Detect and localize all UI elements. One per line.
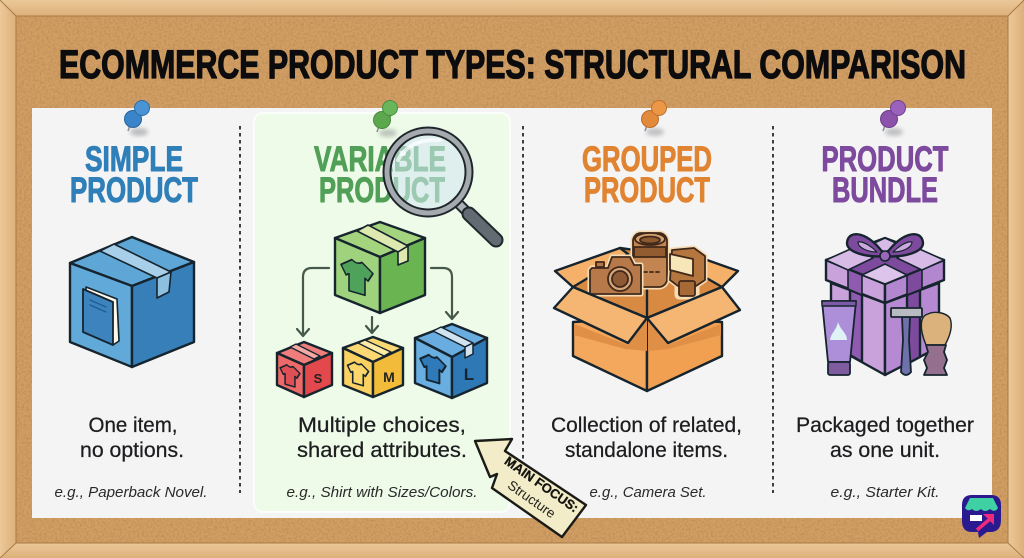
icon: green parent box — [335, 222, 425, 313]
heading: simple product: PRODUCT — [70, 171, 198, 210]
description: simple product: One item, — [88, 413, 178, 437]
bow — [847, 234, 923, 256]
icon: yellow medium box: M — [383, 369, 395, 385]
panel: variable product content — [277, 131, 496, 501]
highlighted panel: variable product — [254, 113, 510, 512]
logo badge — [962, 495, 1001, 538]
razor — [901, 317, 911, 375]
icon: blue box with book — [70, 237, 194, 367]
icon: magnifying glass — [387, 131, 496, 240]
heading: grouped product: PRODUCT — [584, 171, 710, 210]
paper sheet — [32, 108, 992, 518]
callout: main focus arrow — [475, 439, 586, 537]
example: grouped product: e.g., Camera Set. — [590, 484, 706, 501]
heading: simple product: SIMPLE — [85, 140, 183, 179]
description: product bundle: Packaged together — [796, 413, 974, 437]
example: product bundle: e.g., Starter Kit. — [830, 484, 940, 501]
heading: product bundle: BUNDLE — [832, 171, 938, 210]
description: variable product: shared attributes. — [297, 438, 467, 462]
pin: blue — [124, 100, 150, 136]
arrows: parent box to variants — [297, 268, 458, 336]
tube — [822, 301, 856, 362]
callout: main focus arrow: Structure — [505, 477, 558, 521]
example: variable product: e.g., Shirt with Sizes/Colors. — [286, 484, 478, 501]
description: grouped product: Collection of related, — [551, 413, 742, 437]
heading: variable product: PRODUCT — [319, 171, 445, 210]
heading: variable product: VARIABLE — [314, 140, 446, 179]
panel: simple product — [54, 140, 208, 501]
icon: red small box — [277, 342, 332, 397]
description: grouped product: standalone items. — [565, 438, 728, 462]
icon: open box with camera gear — [554, 233, 740, 391]
heading: grouped product — [582, 140, 712, 210]
pin: orange — [642, 100, 666, 136]
panel: grouped product — [551, 140, 742, 501]
example: simple product: e.g., Paperback Novel. — [54, 484, 208, 501]
column dividers — [240, 126, 773, 493]
brush — [921, 312, 951, 345]
callout: main focus arrow: MAIN FOCUS: — [502, 453, 581, 515]
heading: variable product — [314, 140, 446, 210]
description: variable product: Multiple choices, — [298, 413, 466, 437]
heading: simple product — [70, 140, 198, 210]
panel: product bundle — [796, 140, 974, 501]
heading: product bundle — [822, 140, 948, 210]
camera — [590, 257, 641, 294]
flash — [670, 248, 705, 297]
icon: yellow medium box — [343, 337, 403, 397]
description: product bundle: as one unit. — [830, 438, 940, 462]
heading: grouped product: GROUPED — [582, 140, 712, 179]
heading: product bundle: PRODUCT — [822, 140, 948, 179]
icon: gift box with grooming items — [822, 234, 951, 375]
icon: blue large box — [415, 324, 487, 398]
pin: green — [374, 100, 398, 137]
pin: purple — [880, 100, 906, 136]
icon: red small box: S — [314, 371, 323, 386]
lens — [633, 233, 667, 287]
icon: blue large box: L — [464, 365, 474, 384]
description: simple product: no options. — [80, 438, 184, 462]
